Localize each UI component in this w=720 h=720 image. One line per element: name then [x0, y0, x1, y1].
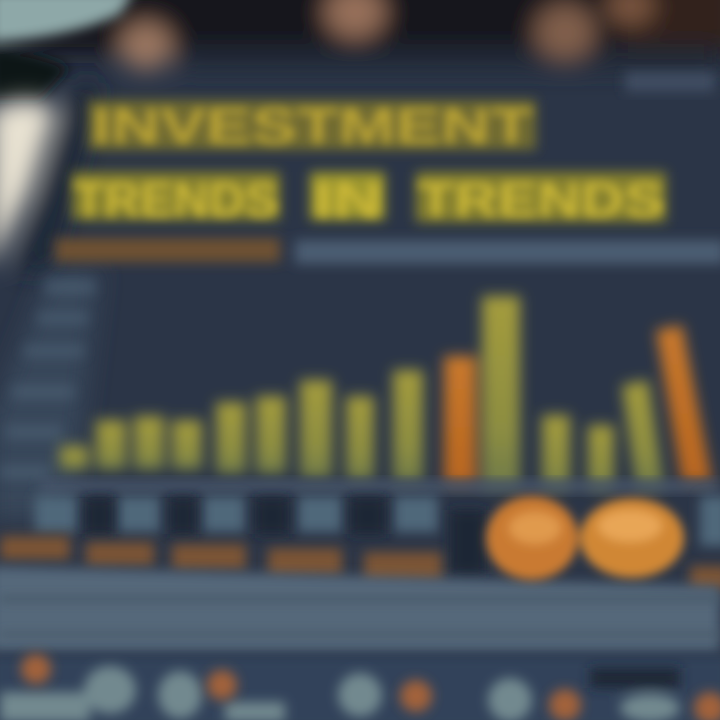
- dark gaps between columns: [85, 498, 486, 574]
- bottom row dark strip: [0, 655, 720, 720]
- band rule lines: [0, 596, 720, 637]
- bottom row orange dots: [21, 654, 720, 720]
- title line 2: [72, 172, 666, 227]
- left axis labels: [0, 280, 95, 479]
- left axis column: [0, 270, 100, 520]
- lower grey-blue band: [0, 566, 720, 652]
- top dark photo strip with blurred figures: [0, 0, 720, 70]
- title line 2: TRENDS: [418, 174, 664, 227]
- column labels orange: [0, 536, 720, 590]
- top-left foreground object: [0, 0, 135, 100]
- top-right small label: [625, 72, 715, 92]
- chart axis band: [40, 480, 720, 492]
- coins: [486, 496, 684, 580]
- title line 2: IN: [314, 174, 382, 227]
- subtitle band: [55, 238, 720, 264]
- title line 2: TRENDS: [74, 174, 278, 227]
- bottom row light blobs: [0, 666, 680, 720]
- title: [72, 98, 666, 227]
- left white foreground shape and slanted panel edge: [0, 80, 100, 275]
- title line 1: INVESTMENT: [92, 98, 532, 154]
- coin right: [580, 498, 684, 578]
- column labels grey: [35, 496, 720, 546]
- bar chart: [60, 296, 712, 489]
- coin left: [486, 496, 578, 580]
